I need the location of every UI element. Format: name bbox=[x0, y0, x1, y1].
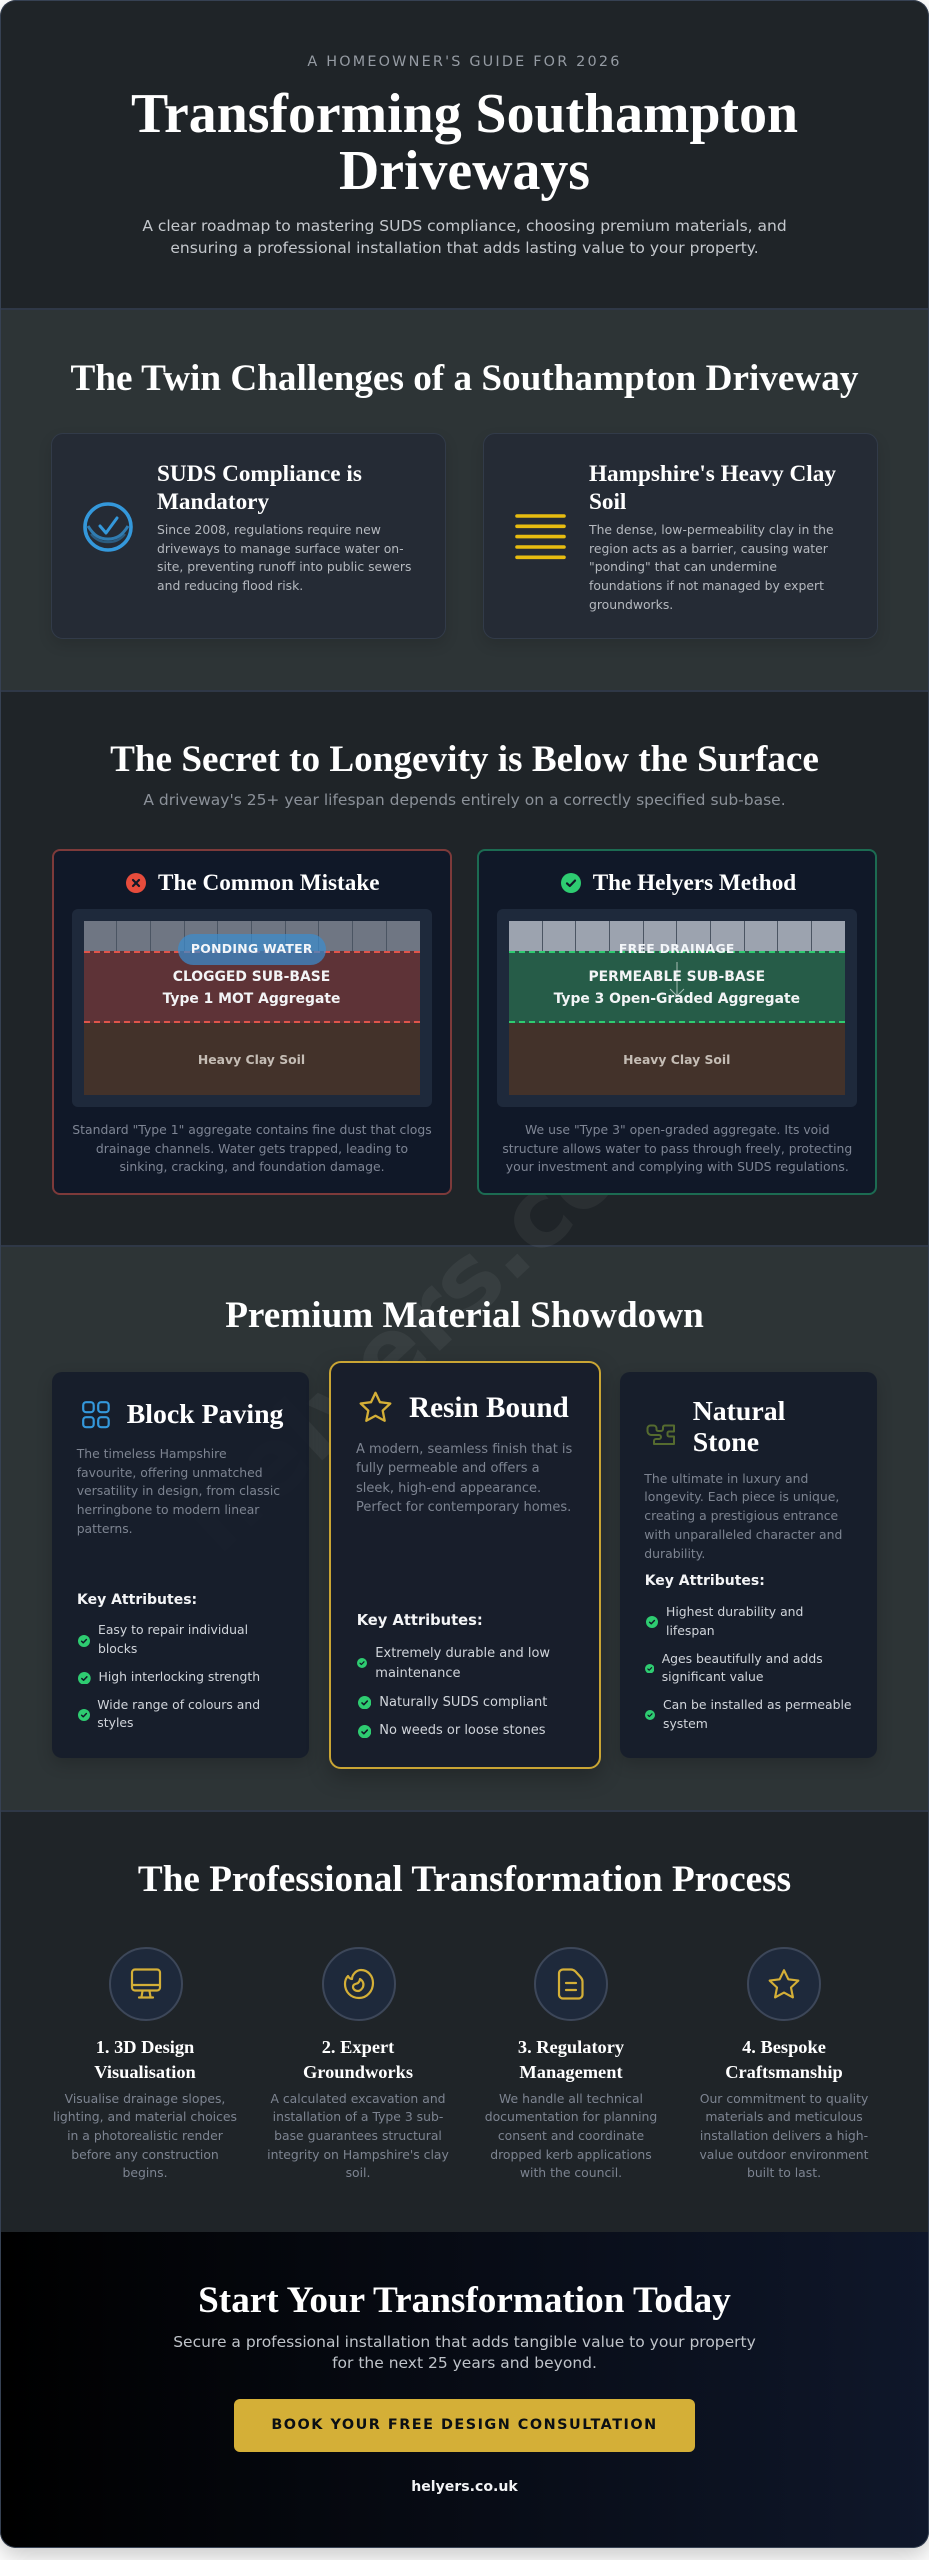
sub-base label: CLOGGED SUB-BASE bbox=[173, 969, 330, 985]
panel: the helyers method bbox=[477, 849, 877, 1195]
step title: 2. Expert bbox=[322, 2037, 394, 2057]
clay layer bbox=[84, 1023, 420, 1095]
icon: stone bbox=[646, 1424, 675, 1445]
card heading: Hampshire's Heavy Clay bbox=[589, 460, 836, 486]
section heading: The Secret to Longevity is Below the Surface bbox=[110, 738, 819, 780]
card description: sleek, high-end appearance. bbox=[356, 1481, 541, 1496]
clogged sub-base layer bbox=[84, 951, 420, 1023]
attribute list: maintenance bbox=[375, 1666, 460, 1681]
step description: value outdoor environment bbox=[699, 2147, 869, 2162]
attribute list: Easy to repair individual bbox=[98, 1622, 248, 1637]
cta text bbox=[173, 2332, 756, 2372]
icon: green check bbox=[561, 873, 581, 893]
step 3: regulatory bbox=[485, 1947, 657, 2180]
sub-base label: Type 3 Open-Graded Aggregate bbox=[554, 991, 800, 1007]
card heading bbox=[693, 1396, 785, 1458]
panel caption: structure allows water to pass through freely, protecting bbox=[502, 1141, 852, 1156]
step description: Our commitment to quality bbox=[700, 2090, 868, 2106]
panel caption: sinking, cracking, and foundation damage. bbox=[119, 1159, 385, 1174]
attribute list: significant value bbox=[662, 1669, 763, 1684]
cta button bbox=[234, 2399, 695, 2452]
icon: blocks bbox=[82, 1401, 110, 1428]
card description: The timeless Hampshire bbox=[77, 1446, 227, 1461]
panel heading: The Common Mistake bbox=[158, 870, 380, 896]
card heading bbox=[589, 460, 836, 515]
panel caption: your investment and complying with SUDS regulations. bbox=[506, 1159, 849, 1174]
card description bbox=[356, 1442, 572, 1515]
attribute list: blocks bbox=[98, 1641, 137, 1656]
card description: fully permeable and offers a bbox=[356, 1461, 540, 1476]
title: Transforming Southampton bbox=[131, 82, 798, 144]
step description: with the council. bbox=[520, 2165, 622, 2180]
step description: soil. bbox=[346, 2165, 370, 2180]
attribute list bbox=[645, 1604, 852, 1731]
card heading: Natural bbox=[693, 1396, 785, 1427]
key attributes heading: Key Attributes: bbox=[645, 1573, 765, 1589]
ponding water label bbox=[178, 934, 326, 965]
clay layer bbox=[509, 1023, 845, 1095]
icon: soil layers bbox=[515, 514, 566, 560]
subtitle bbox=[142, 217, 787, 257]
section: twin challenges bbox=[0, 308, 929, 690]
section heading: The Twin Challenges of a Southampton Driveway bbox=[71, 358, 858, 398]
card text: site, preventing runoff into public sewers bbox=[157, 559, 411, 574]
step title bbox=[303, 2037, 413, 2082]
card description: Perfect for contemporary homes. bbox=[356, 1500, 571, 1515]
card description bbox=[644, 1471, 842, 1561]
step title bbox=[94, 2037, 196, 2082]
pavers layer bbox=[84, 921, 420, 952]
card description bbox=[76, 1446, 280, 1536]
step description: Visualise drainage slopes, bbox=[65, 2090, 225, 2106]
attribute list: No weeds or loose stones bbox=[379, 1723, 546, 1738]
step title: 3. Regulatory bbox=[518, 2037, 624, 2057]
step description bbox=[53, 2090, 237, 2180]
cta heading: Start Your Transformation Today bbox=[198, 2280, 731, 2321]
step description: installation of a Type 3 sub- bbox=[273, 2109, 443, 2124]
step description: lighting, and material choices bbox=[53, 2109, 237, 2124]
icon: red cross bbox=[126, 873, 146, 893]
section: sub-base comparison bbox=[0, 690, 929, 1245]
card text: and reducing flood risk. bbox=[157, 578, 303, 593]
free drainage label: FREE DRAINAGE bbox=[619, 941, 735, 956]
icon: monitor bbox=[109, 1947, 183, 2021]
step 1: 3D design bbox=[53, 1947, 237, 2180]
sub-base label bbox=[162, 969, 340, 1007]
panel caption: Standard "Type 1" aggregate contains fine dust that clogs bbox=[72, 1122, 432, 1137]
attribute list: Can be installed as permeable bbox=[663, 1697, 852, 1712]
card text: groundworks. bbox=[589, 597, 673, 612]
header section bbox=[0, 0, 929, 308]
step description: dropped kerb applications bbox=[490, 2147, 652, 2162]
attribute list: system bbox=[663, 1716, 708, 1731]
attribute list bbox=[357, 1646, 550, 1738]
card text: driveways to manage surface water on- bbox=[157, 541, 404, 556]
card description: favourite, offering unmatched bbox=[77, 1465, 263, 1480]
pavers layer bbox=[509, 921, 845, 952]
card: block paving bbox=[52, 1372, 309, 1758]
card text: foundations if not managed by expert bbox=[589, 578, 824, 593]
card description: patterns. bbox=[77, 1521, 133, 1536]
panel caption: We use "Type 3" open-graded aggregate. Its void bbox=[525, 1122, 830, 1137]
step description: in a photorealistic render bbox=[67, 2128, 223, 2143]
card description: durability. bbox=[644, 1546, 705, 1561]
section: call to action bbox=[0, 2232, 929, 2548]
card heading: Soil bbox=[589, 489, 626, 515]
step description: integrity on Hampshire's clay bbox=[267, 2147, 449, 2162]
section: materials bbox=[0, 1245, 929, 1810]
card description: with unparalleled character and bbox=[644, 1527, 842, 1542]
card description: herringbone to modern linear bbox=[77, 1502, 259, 1517]
card text: region acts as a barrier, causing water bbox=[589, 541, 828, 556]
diagram: clogged sub-base bbox=[72, 909, 432, 1107]
section: process bbox=[0, 1810, 929, 2232]
step description: begins. bbox=[122, 2165, 168, 2180]
step title: Management bbox=[519, 2062, 623, 2082]
panel heading: The Helyers Method bbox=[593, 870, 796, 896]
icon: document bbox=[534, 1947, 608, 2021]
clay label: Heavy Clay Soil bbox=[198, 1052, 305, 1067]
cta button: BOOK YOUR FREE DESIGN CONSULTATION bbox=[271, 2417, 658, 2433]
panel caption bbox=[72, 1122, 432, 1174]
diagram: permeable sub-base bbox=[497, 909, 857, 1107]
key attributes heading: Key Attributes: bbox=[77, 1592, 197, 1608]
step title: Visualisation bbox=[94, 2062, 196, 2082]
clay label: Heavy Clay Soil bbox=[623, 1052, 730, 1067]
section heading: The Professional Transformation Process bbox=[138, 1859, 791, 1900]
step description bbox=[267, 2090, 449, 2180]
card heading: Stone bbox=[693, 1427, 759, 1458]
step description: before any construction bbox=[71, 2147, 219, 2162]
step description: materials and meticulous bbox=[705, 2109, 863, 2124]
subtitle: A clear roadmap to mastering SUDS compliance, choosing premium materials, and bbox=[142, 217, 787, 235]
card: natural stone bbox=[620, 1372, 877, 1758]
card heading bbox=[157, 460, 362, 515]
sub-base label: PERMEABLE SUB-BASE bbox=[588, 969, 765, 985]
card text: The dense, low-permeability clay in the bbox=[589, 522, 834, 537]
card text bbox=[157, 522, 411, 593]
card text bbox=[588, 522, 834, 612]
step description: We handle all technical bbox=[499, 2090, 643, 2106]
step description: installation delivers a high- bbox=[700, 2128, 868, 2143]
sub-base label bbox=[554, 969, 800, 1007]
attribute list: Ages beautifully and adds bbox=[662, 1651, 823, 1666]
permeable sub-base layer bbox=[509, 951, 845, 1023]
sub-base label: Type 1 MOT Aggregate bbox=[163, 991, 340, 1007]
card: heavy clay soil bbox=[483, 433, 878, 639]
card: SUDS compliance bbox=[51, 433, 446, 639]
card text: Since 2008, regulations require new bbox=[157, 522, 381, 537]
attribute list: Extremely durable and low bbox=[375, 1646, 550, 1661]
section subheading: A driveway's 25+ year lifespan depends entirely on a correctly specified sub-base. bbox=[143, 791, 786, 809]
icon: water check bbox=[83, 502, 133, 552]
card heading: Mandatory bbox=[157, 489, 269, 515]
icon: flame bbox=[322, 1947, 396, 2021]
card text: "ponding" that can undermine bbox=[589, 559, 777, 574]
title bbox=[131, 82, 798, 202]
card description: longevity. Each piece is unique, bbox=[644, 1489, 839, 1504]
card heading: Resin Bound bbox=[409, 1392, 569, 1424]
website: helyers.co.uk bbox=[411, 2479, 518, 2495]
ponding water label: PONDING WATER bbox=[191, 941, 313, 956]
attribute list: Highest durability and bbox=[666, 1604, 803, 1619]
title: Driveways bbox=[339, 140, 590, 202]
arrow: drainage bbox=[670, 962, 684, 996]
card description: versatility in design, from classic bbox=[77, 1483, 280, 1498]
attribute list: High interlocking strength bbox=[98, 1669, 260, 1684]
panel caption bbox=[502, 1122, 852, 1174]
step title bbox=[725, 2037, 843, 2082]
icon: star bbox=[747, 1947, 821, 2021]
cta text: for the next 25 years and beyond. bbox=[332, 2354, 597, 2372]
step title bbox=[518, 2037, 624, 2082]
card description: creating a prestigious entrance bbox=[644, 1508, 838, 1523]
step description bbox=[699, 2090, 869, 2180]
attribute list bbox=[78, 1622, 260, 1730]
attribute list: Wide range of colours and bbox=[97, 1697, 260, 1712]
card: resin bound (featured) bbox=[329, 1361, 601, 1769]
step 4: craftsmanship bbox=[699, 1947, 869, 2180]
cta text: Secure a professional installation that adds tangible value to your property bbox=[173, 2332, 756, 2350]
attribute list: Naturally SUDS compliant bbox=[379, 1695, 547, 1710]
step description: consent and coordinate bbox=[498, 2128, 644, 2143]
card description: The ultimate in luxury and bbox=[644, 1471, 808, 1486]
section heading: Premium Material Showdown bbox=[225, 1295, 704, 1336]
step title: 1. 3D Design bbox=[96, 2037, 194, 2057]
attribute list: lifespan bbox=[666, 1623, 715, 1638]
card heading: SUDS Compliance is bbox=[157, 460, 362, 486]
step description: documentation for planning bbox=[485, 2109, 657, 2124]
kicker: A HOMEOWNER'S GUIDE FOR 2026 bbox=[307, 54, 622, 70]
icon: star bbox=[360, 1392, 392, 1422]
step 2: groundworks bbox=[267, 1947, 449, 2180]
panel: the common mistake bbox=[52, 849, 452, 1195]
step title: Groundworks bbox=[303, 2062, 413, 2082]
step description: built to last. bbox=[747, 2165, 821, 2180]
step title: 4. Bespoke bbox=[742, 2037, 826, 2057]
subtitle: ensuring a professional installation that adds lasting value to your property. bbox=[170, 239, 759, 257]
step description: A calculated excavation and bbox=[270, 2090, 446, 2106]
key attributes heading: Key Attributes: bbox=[357, 1612, 483, 1628]
step title: Craftsmanship bbox=[725, 2062, 843, 2082]
step description bbox=[485, 2090, 657, 2180]
card description: A modern, seamless finish that is bbox=[356, 1442, 572, 1456]
panel caption: drainage channels. Water gets trapped, leading to bbox=[96, 1141, 408, 1156]
card heading: Block Paving bbox=[127, 1399, 283, 1430]
watermark: helyers.co.uk bbox=[158, 996, 766, 1574]
step description: base guarantees structural bbox=[274, 2128, 442, 2143]
attribute list: styles bbox=[97, 1715, 133, 1730]
